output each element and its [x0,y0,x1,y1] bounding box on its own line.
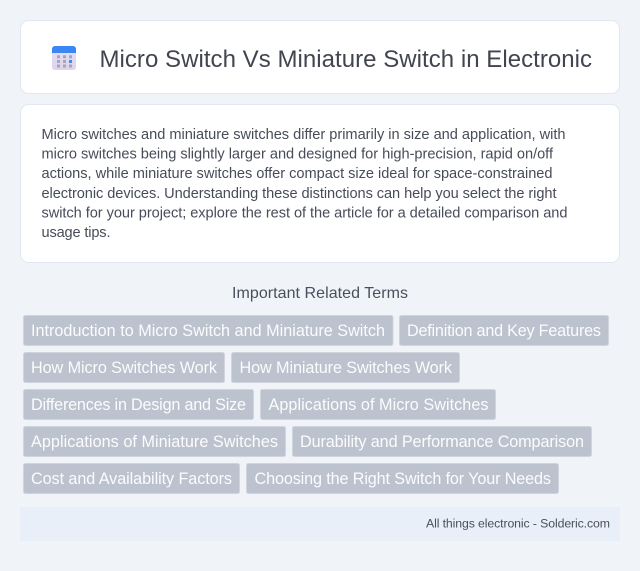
tag: Choosing the Right Switch for Your Needs [254,470,551,488]
summary paragraph [42,127,568,241]
tag [24,316,393,346]
tag [24,390,254,420]
tag: Cost and Availability Factors [31,470,232,488]
panel: title card [20,20,620,94]
tag: Applications of Miniature Switches [31,433,278,451]
summary paragraph: micro switches being slightly larger and designed for high-precision, rapid on/off [42,147,554,163]
footer credit: All things electronic - Solderic.com [426,516,610,530]
tag [246,464,558,494]
tag: Applications of Micro Switches [268,396,488,414]
tag: Differences in Design and Size [31,396,246,414]
tag: Durability and Performance Comparison [300,433,584,451]
panel: summary card [20,104,620,262]
tag: Definition and Key Features [407,322,601,340]
tag: How Miniature Switches Work [240,359,453,377]
summary paragraph: electronic devices. Understanding these distinctions can help you select the right [42,186,556,202]
summary paragraph: switch for your project; explore the rest of the article for a detailed comparison and [42,205,568,221]
tag [292,426,592,456]
tag [260,390,496,420]
tag [24,426,286,456]
summary paragraph: actions, while miniature switches offer compact size ideal for space-constrained [42,166,552,182]
heading: related terms: Important Related Terms [232,285,408,302]
summary paragraph: Micro switches and miniature switches differ primarily in size and application, with [42,127,566,143]
tag [24,464,240,494]
icon: calendar [52,46,76,70]
tag [24,352,224,382]
tag [400,316,608,346]
tag [232,352,460,382]
tag: How Micro Switches Work [31,359,218,377]
footer bar [20,507,620,541]
tag: Introduction to Micro Switch and Miniature Switch [31,322,385,340]
summary paragraph: usage tips. [42,225,110,241]
title: Micro Switch Vs Miniature Switch in Electronic [100,46,592,73]
tag list [24,316,608,494]
